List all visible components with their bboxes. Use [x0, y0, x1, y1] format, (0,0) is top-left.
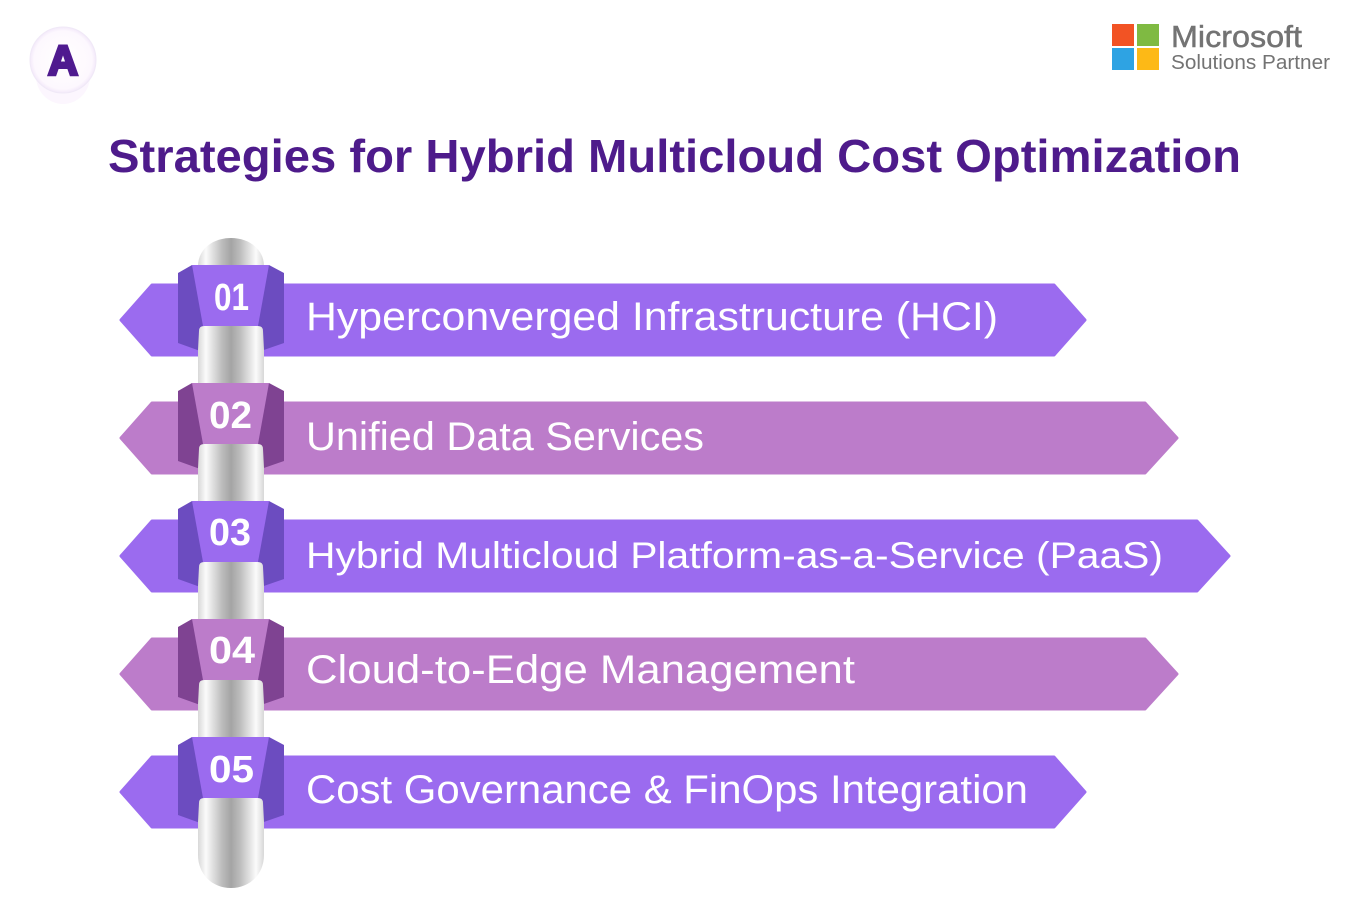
logo: Microsoft Solutions Partner: Solutions Partner	[1171, 52, 1330, 74]
collar 03: 03	[209, 512, 251, 554]
logo: bubble A	[30, 27, 96, 104]
pole segment 2	[198, 444, 264, 502]
banner 3: Hybrid Multicloud Platform-as-a-Service (PaaS)	[306, 535, 1163, 576]
collar 04	[178, 619, 284, 706]
banner 5: Cost Governance & FinOps Integration	[306, 768, 1028, 812]
pole segment 3	[198, 562, 264, 620]
banner 1	[121, 285, 1085, 355]
pole bottom	[198, 798, 264, 888]
banner 2: Unified Data Services	[306, 415, 704, 459]
logo: bubble A: A	[48, 37, 78, 84]
banner 1: Hyperconverged Infrastructure (HCI)	[306, 295, 998, 339]
banner 4	[121, 639, 1177, 709]
banner 3	[121, 521, 1229, 591]
banner 5	[121, 757, 1085, 827]
collar 04: 04	[209, 630, 255, 672]
banner 2	[121, 403, 1177, 473]
collar 02: 02	[209, 395, 252, 437]
pole segment 4	[198, 680, 264, 738]
collar 01: 01	[214, 277, 249, 319]
logo: Microsoft Solutions Partner: Microsoft	[1171, 19, 1302, 54]
pole segment 1	[198, 326, 264, 384]
collar 01	[178, 265, 284, 352]
collar 05: 05	[209, 749, 254, 791]
collar 02	[178, 383, 284, 470]
title: Strategies for Hybrid Multicloud Cost Optimization	[108, 130, 1241, 182]
collar 03	[178, 501, 284, 588]
pole top dome	[198, 238, 264, 268]
logo: Microsoft Solutions Partner	[1112, 19, 1330, 74]
banner 4: Cloud-to-Edge Management	[306, 648, 855, 692]
collar 05	[178, 737, 284, 824]
